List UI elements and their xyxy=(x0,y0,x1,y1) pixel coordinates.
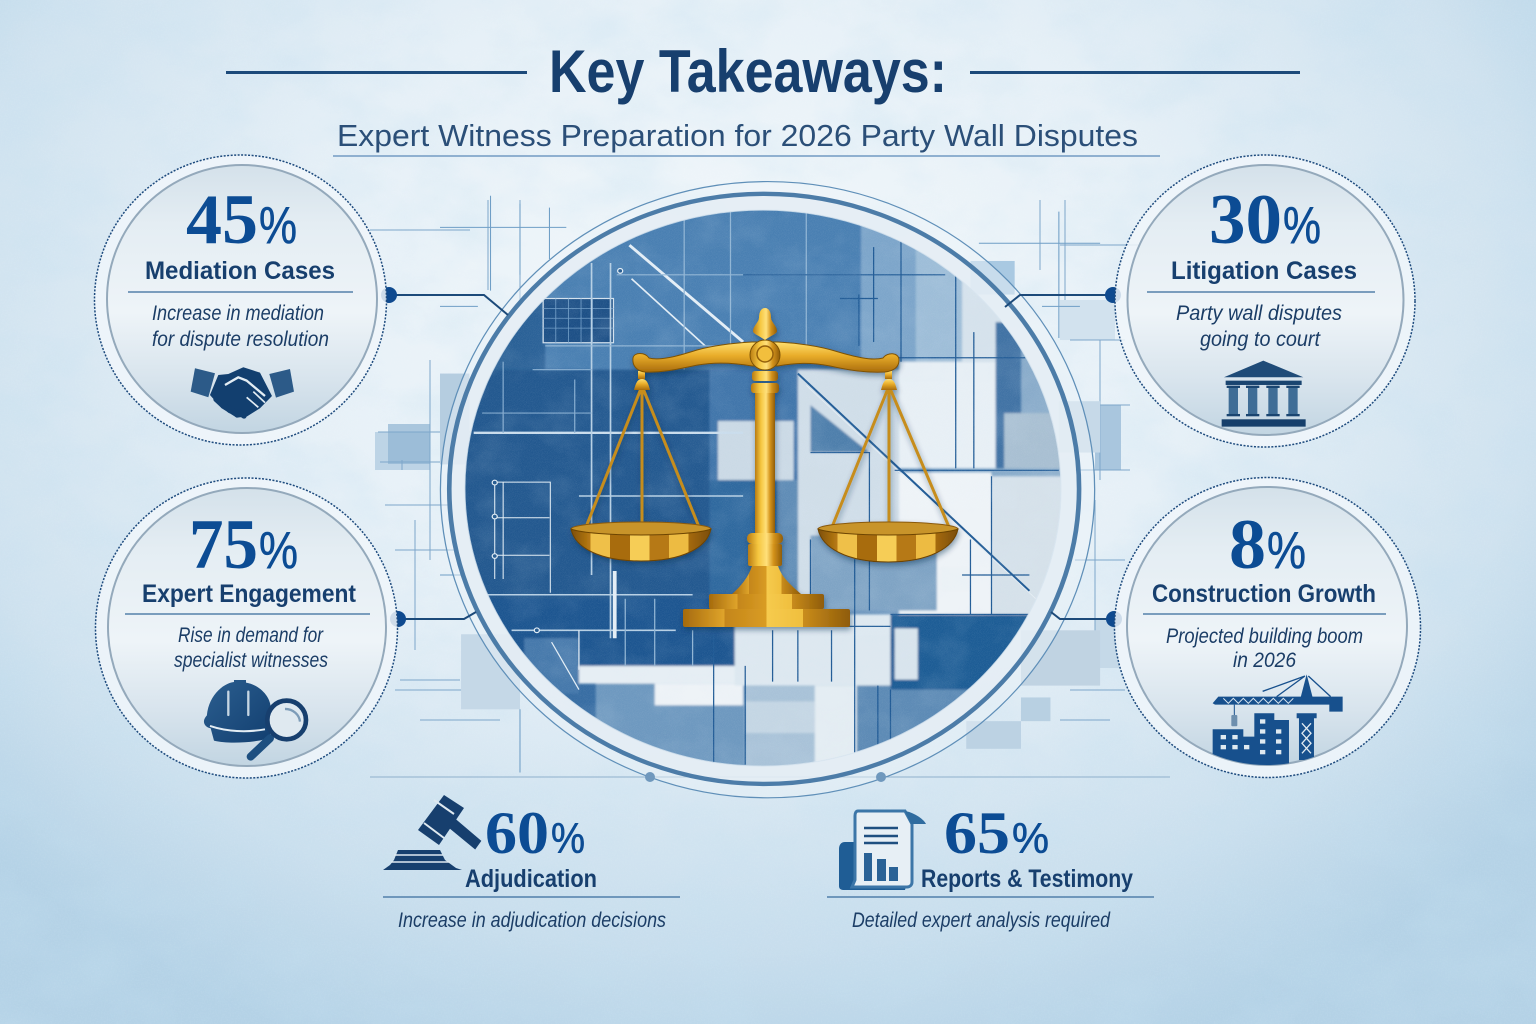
beam xyxy=(633,342,899,372)
stat: 75%: % xyxy=(259,522,298,580)
icon: report document xyxy=(839,811,926,890)
stat: 45% xyxy=(186,181,297,259)
title rule right xyxy=(970,71,1300,74)
stat: 30%: % xyxy=(1283,197,1321,255)
description: Rise in demand for xyxy=(178,624,324,647)
stat: 30%: 30 xyxy=(1209,181,1282,259)
right pan xyxy=(818,522,958,562)
blueprint grid table xyxy=(543,298,613,343)
left pan xyxy=(571,522,711,561)
title text: Key Takeaways: xyxy=(549,38,947,105)
stat: 65%: % xyxy=(1012,815,1049,863)
connector: litigation to medallion xyxy=(1005,287,1121,307)
blueprint blocks behind the ring xyxy=(440,196,1100,773)
blueprint lines outside the central circle xyxy=(370,200,1170,777)
main ring xyxy=(449,194,1079,784)
column xyxy=(755,390,775,536)
stat: 30% xyxy=(1209,181,1321,259)
stat: 65% xyxy=(944,800,1049,866)
description xyxy=(174,624,328,672)
label: Adjudication xyxy=(465,865,597,893)
description xyxy=(1166,625,1363,672)
icon: hard hat and magnifier xyxy=(204,680,306,757)
right pan strings xyxy=(832,386,949,532)
panel: construction growth xyxy=(1114,478,1420,778)
stat: 8%: 8 xyxy=(1229,506,1266,584)
icon: crane and buildings xyxy=(1213,674,1343,765)
label: Reports & Testimony xyxy=(921,865,1133,893)
description: going to court xyxy=(1200,328,1321,351)
icon: golden scales of justice xyxy=(571,308,958,627)
description: specialist witnesses xyxy=(174,649,328,672)
disc texture xyxy=(461,204,1067,772)
description: Projected building boom xyxy=(1166,625,1363,648)
stat: 8%: % xyxy=(1267,522,1306,580)
stat: 75% xyxy=(189,506,298,584)
stat: 75%: 75 xyxy=(189,506,258,584)
label: Construction Growth xyxy=(1152,580,1376,608)
panel: mediation cases xyxy=(94,155,386,445)
description: Party wall disputes xyxy=(1176,302,1342,325)
white blueprint node marks xyxy=(492,268,623,633)
description: Detailed expert analysis required xyxy=(852,909,1111,932)
dark blueprint lines xyxy=(714,239,1059,765)
white blueprint lines xyxy=(474,212,861,690)
ring nodes xyxy=(645,772,886,782)
hook left xyxy=(634,371,650,390)
panel: litigation cases xyxy=(1115,155,1415,447)
description: Increase in adjudication decisions xyxy=(398,909,666,932)
hook right xyxy=(881,371,897,390)
stat: 45%: % xyxy=(259,197,297,255)
soft washes xyxy=(465,204,1063,769)
stat: 60% xyxy=(485,800,585,866)
collars xyxy=(747,371,783,566)
stat: 60%: % xyxy=(551,815,585,863)
description: in 2026 xyxy=(1233,649,1296,672)
stat: 60%: 60 xyxy=(485,800,549,866)
stat: 45%: 45 xyxy=(186,181,258,259)
label: Expert Engagement xyxy=(142,580,357,608)
title rule left xyxy=(226,71,527,74)
blueprint disc xyxy=(461,204,1067,772)
connector: construction growth to medallion xyxy=(1051,611,1122,627)
description xyxy=(152,302,329,351)
panel: expert engagement xyxy=(96,478,398,778)
disc edge xyxy=(465,210,1061,766)
title xyxy=(226,38,1300,105)
left pan strings xyxy=(586,386,699,532)
base plates xyxy=(683,594,850,627)
connector: expert engagement to medallion xyxy=(390,611,476,627)
finial xyxy=(753,308,777,340)
label: Litigation Cases xyxy=(1171,257,1357,285)
label: Mediation Cases xyxy=(145,257,335,285)
connector: mediation to medallion xyxy=(381,287,508,315)
outer thin ring xyxy=(440,182,1095,798)
stat: 8% xyxy=(1229,506,1306,584)
description: Increase in mediation xyxy=(152,302,324,325)
central blueprint medallion xyxy=(440,182,1100,798)
stat: 65%: 65 xyxy=(944,800,1010,866)
description xyxy=(1176,302,1342,351)
base cone xyxy=(732,566,801,594)
description: for dispute resolution xyxy=(152,328,329,351)
icon: gavel xyxy=(383,795,480,870)
pivot xyxy=(750,340,780,370)
icon: courthouse xyxy=(1222,361,1306,427)
subtitle: Expert Witness Preparation for 2026 Party Wall Disputes xyxy=(337,118,1138,153)
icon: handshake xyxy=(191,367,294,418)
panel: reports and testimony xyxy=(827,800,1154,932)
panel: adjudication xyxy=(383,795,680,932)
